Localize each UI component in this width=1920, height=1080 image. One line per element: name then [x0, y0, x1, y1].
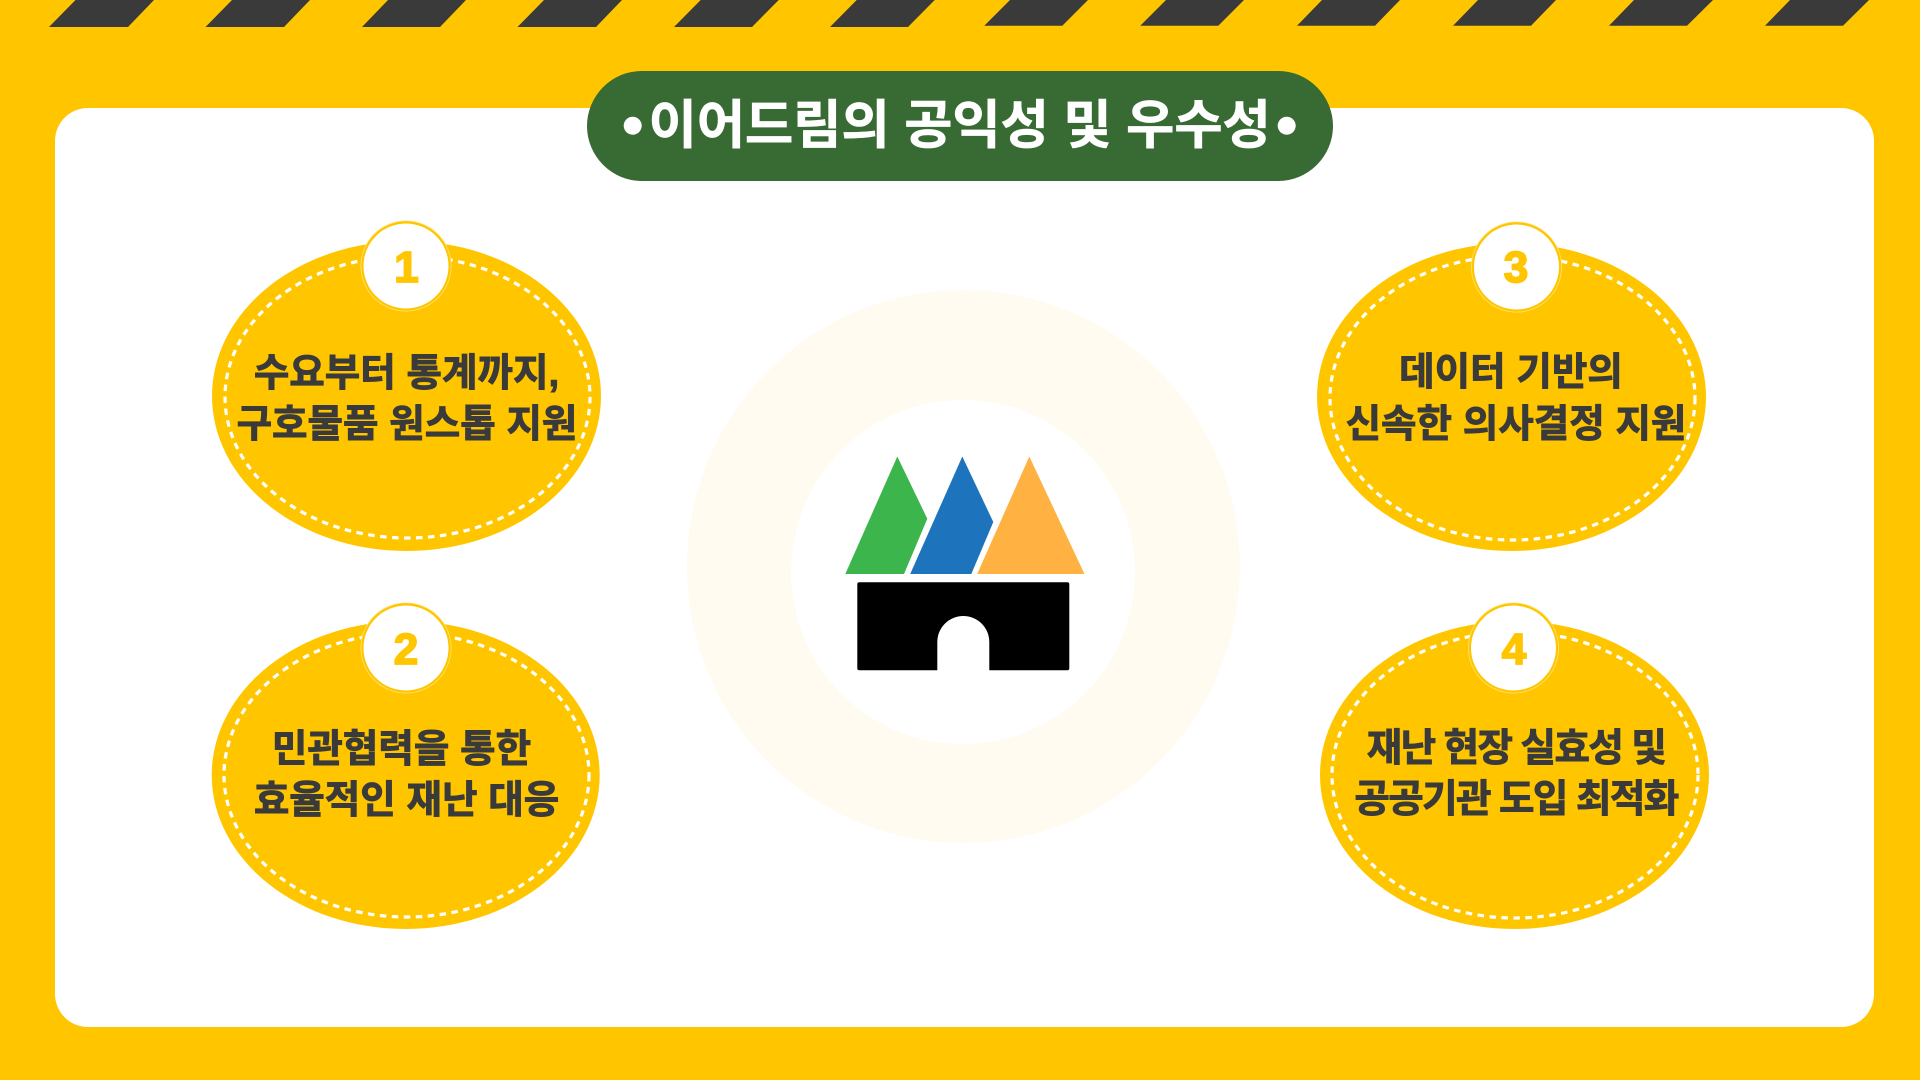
text: item 2: 민관협력을 통한 — [272, 728, 531, 771]
text: item 4: 재난 현장 실효성 및 — [1367, 727, 1665, 770]
badge: number 4: 4 — [1502, 625, 1527, 674]
badge: number 4 — [1468, 602, 1559, 694]
text: item 1: 수요부터 통계까지, — [254, 352, 559, 395]
title pill — [587, 71, 1333, 181]
center logo — [687, 290, 1240, 843]
text: item 1: 구호물품 원스톱 지원 — [237, 403, 577, 446]
text: item 2: 효율적인 재난 대응 — [254, 779, 559, 822]
badge: number 2 — [360, 602, 452, 694]
icon: orange roof — [977, 456, 1084, 574]
icon: black gate — [857, 582, 1069, 670]
badge: number 3 — [1471, 222, 1562, 312]
icon: green roof — [845, 456, 927, 574]
badge: number 2: 2 — [394, 625, 418, 674]
hazard stripes — [49, 0, 1869, 27]
icon: blue roof — [910, 456, 993, 574]
badge: number 1 — [360, 220, 452, 312]
panel: item 3 — [1317, 222, 1706, 551]
badge: number 3: 3 — [1504, 243, 1528, 292]
badge: number 1: 1 — [394, 243, 419, 292]
title: 이어드림의 공익성 및 우수성 — [649, 97, 1271, 155]
panel: item 2 — [212, 602, 600, 929]
panel: item 1 — [212, 220, 601, 551]
text: item 4: 공공기관 도입 최적화 — [1354, 778, 1679, 821]
text: item 3: 신속한 의사결정 지원 — [1346, 403, 1686, 446]
text: item 3: 데이터 기반의 — [1399, 351, 1623, 394]
panel: item 4 — [1320, 602, 1709, 929]
